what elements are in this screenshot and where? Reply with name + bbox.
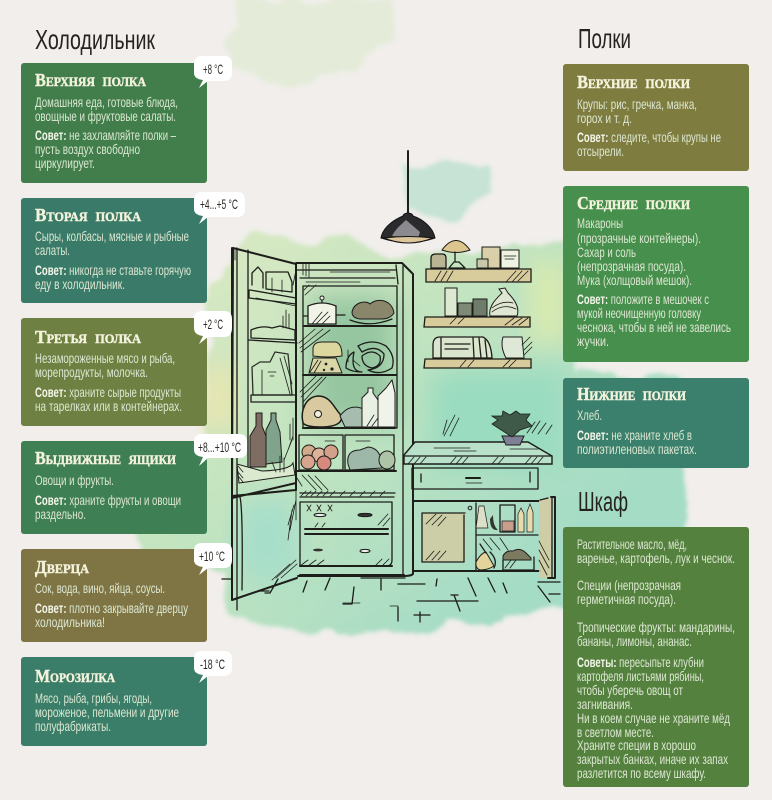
crisper drawers with fruit xyxy=(297,435,396,471)
panel: верхние полки: горох и т. д. xyxy=(577,110,632,126)
panel: дверца: Сок, вода, вино, яйца, соусы. xyxy=(35,580,165,596)
temperature bubble: +10 xyxy=(194,543,232,575)
title: Холодильник: Холодильник xyxy=(35,24,156,55)
panel: нижние полки: Нижние полки xyxy=(577,384,686,404)
illustration: lamp xyxy=(381,151,435,243)
panel: выдвижные ящики: Овощи и фрукты. xyxy=(35,472,114,488)
panel: вторая полка: салаты. xyxy=(35,242,70,258)
panel: выдвижные ящики: Выдвижные ящики xyxy=(35,448,176,468)
panel: нижние полки xyxy=(563,378,749,468)
middle interior shelf with cheese and sausage xyxy=(299,329,396,375)
fridge body xyxy=(296,263,413,576)
panel: шкаф: картофеля листьями рябины, xyxy=(577,668,704,684)
panel: средние полки xyxy=(563,186,749,362)
panel: третья полка: Третья полка xyxy=(35,327,142,347)
panel: средние полки: Средние полки xyxy=(577,193,690,213)
panel: верхняя полка xyxy=(21,63,207,183)
panel: третья полка: на тарелках или в контейнерах. xyxy=(35,398,182,414)
door bottles xyxy=(237,413,296,483)
freezer drawers xyxy=(295,475,404,575)
panel: верхняя полка: овощные и фруктовые салаты. xyxy=(35,108,176,124)
panel: нижние полки: Хлеб. xyxy=(577,407,602,423)
cabinet frame with left door xyxy=(413,501,540,571)
panel: дверца: холодильника! xyxy=(35,614,105,630)
bottom shelf items xyxy=(433,337,532,358)
panel: шкаф: Растительное масло, мёд, xyxy=(577,536,687,552)
panel: дверца: Совет: плотно закрывайте дверцу xyxy=(35,600,188,616)
panel: шкаф: чтобы уберечь овощ от xyxy=(577,682,683,698)
top shelf items xyxy=(431,240,519,268)
plant xyxy=(443,411,552,445)
panel: шкаф xyxy=(563,527,749,787)
panel: верхняя полка: Совет: не захламляйте полки – xyxy=(35,127,176,143)
panel: морозилка: Мясо, рыба, грибы, ягоды, xyxy=(35,690,152,706)
panel: нижние полки: Совет: не храните хлеб в xyxy=(577,427,692,443)
panel: средние полки: (прозрачные контейнеры). xyxy=(577,230,701,246)
panel: шкаф: разлетится по всему шкафу. xyxy=(577,765,706,781)
panel: шкаф: Храните специи в хорошо xyxy=(577,737,696,753)
panel: верхняя полка: Верхняя полка xyxy=(35,70,147,90)
panel: выдвижные ящики: раздельно. xyxy=(35,506,86,522)
panel: средние полки: (непрозрачная посуда). xyxy=(577,258,686,274)
temperature bubble: +4...+5: +4...+5 °C xyxy=(200,196,238,212)
title: Полки: Полки xyxy=(578,23,631,54)
panel: средние полки: жучки. xyxy=(577,333,609,349)
title: Шкаф: Шкаф xyxy=(578,486,628,517)
temperature bubble: +8 xyxy=(194,56,232,88)
illustration: kitchen counter and cabinet xyxy=(222,411,560,622)
temperature bubble: +4...+5 xyxy=(194,192,245,224)
temperature bubble: -18 xyxy=(194,651,232,683)
panel: выдвижные ящики xyxy=(21,441,207,534)
temperature bubble: +10: +10 °C xyxy=(199,548,225,564)
panel: вторая полка: Вторая полка xyxy=(35,205,142,225)
panel: морозилка: мороженое, пельмени и другие xyxy=(35,704,179,720)
panel: верхние полки: Совет: следите, чтобы крупы не xyxy=(577,129,721,145)
panel: шкаф: герметичная посуда). xyxy=(577,591,676,607)
panel: шкаф: загнивания. xyxy=(577,696,633,712)
panel: верхняя полка: Домашняя еда, готовые блюда, xyxy=(35,94,178,110)
panel: шкаф: Советы: пересыпьте клубни xyxy=(577,654,704,670)
panel: верхние полки: отсырели. xyxy=(577,143,624,159)
temperature bubble: +2: +2 °C xyxy=(203,316,223,332)
panel: средние полки: Совет: положите в мешочек с xyxy=(577,291,709,307)
counter top xyxy=(404,442,552,464)
watercolor wash xyxy=(138,0,682,632)
panel: вторая полка: еду в холодильник. xyxy=(35,276,125,292)
panel: верхние полки: Верхние полки xyxy=(577,72,690,92)
drawer xyxy=(412,468,538,489)
panel: верхняя полка: циркулирует. xyxy=(35,155,95,171)
panel: дверца: Дверца xyxy=(35,557,90,577)
panel: третья полка xyxy=(21,318,207,426)
cabinet shelves with food xyxy=(476,503,538,570)
panel: морозилка: Морозилка xyxy=(35,666,116,686)
floor lines xyxy=(222,578,560,622)
panel: дверца xyxy=(21,549,207,642)
illustration: wall shelves xyxy=(424,240,532,368)
panel: верхние полки xyxy=(563,64,749,171)
open door xyxy=(232,248,297,610)
panel: средние полки: Сахар и соль xyxy=(577,244,636,260)
panel: шкаф: бананы, лимоны, ананас. xyxy=(577,633,692,649)
panel: средние полки: мукой неочищенную головку xyxy=(577,305,701,321)
panel: морозилка xyxy=(21,657,207,746)
door shelf items xyxy=(249,267,297,402)
middle shelf items xyxy=(445,288,518,316)
panel: шкаф: Специи (непрозрачная xyxy=(577,577,681,593)
temperature bubble: -18: -18 °C xyxy=(200,656,225,672)
panel: третья полка: Совет: храните сырые продукты xyxy=(35,384,181,400)
panel: третья полка: морепродукты, молочка. xyxy=(35,364,148,380)
temperature bubble: +8...+10: +8...+10 °C xyxy=(198,439,241,455)
illustration: fridge xyxy=(232,248,413,610)
panel: средние полки: Мука (холщовый мешок). xyxy=(577,272,692,288)
open cabinet door xyxy=(539,497,555,578)
panel: вторая полка: Совет: никогда не ставьте горячую xyxy=(35,262,191,278)
lower interior shelf with meat, fish and bottles xyxy=(300,376,395,428)
temperature bubble: +2 xyxy=(194,311,232,344)
panel: вторая полка xyxy=(21,198,207,303)
panel: нижние полки: полиэтиленовых пакетах. xyxy=(577,441,697,457)
panel: средние полки: Макароны xyxy=(577,215,623,231)
panel: третья полка: Незамороженные мясо и рыба, xyxy=(35,350,175,366)
shelf boards xyxy=(424,269,531,368)
panel: шкаф: в светлом месте. xyxy=(577,724,654,740)
panel: выдвижные ящики: Совет: храните фрукты и овощи xyxy=(35,492,181,508)
panel: морозилка: полуфабрикаты. xyxy=(35,718,111,734)
panel: вторая полка: Сыры, колбасы, мясные и рыбные xyxy=(35,228,189,244)
temperature bubble: +8: +8 °C xyxy=(203,61,223,77)
panel: верхняя полка: пусть воздух свободно xyxy=(35,141,140,157)
upper interior shelf with pot and chicken xyxy=(304,296,396,326)
temperature bubble: +8...+10 xyxy=(194,434,247,466)
panel: верхние полки: Крупы: рис, гречка, манка, xyxy=(577,96,697,112)
